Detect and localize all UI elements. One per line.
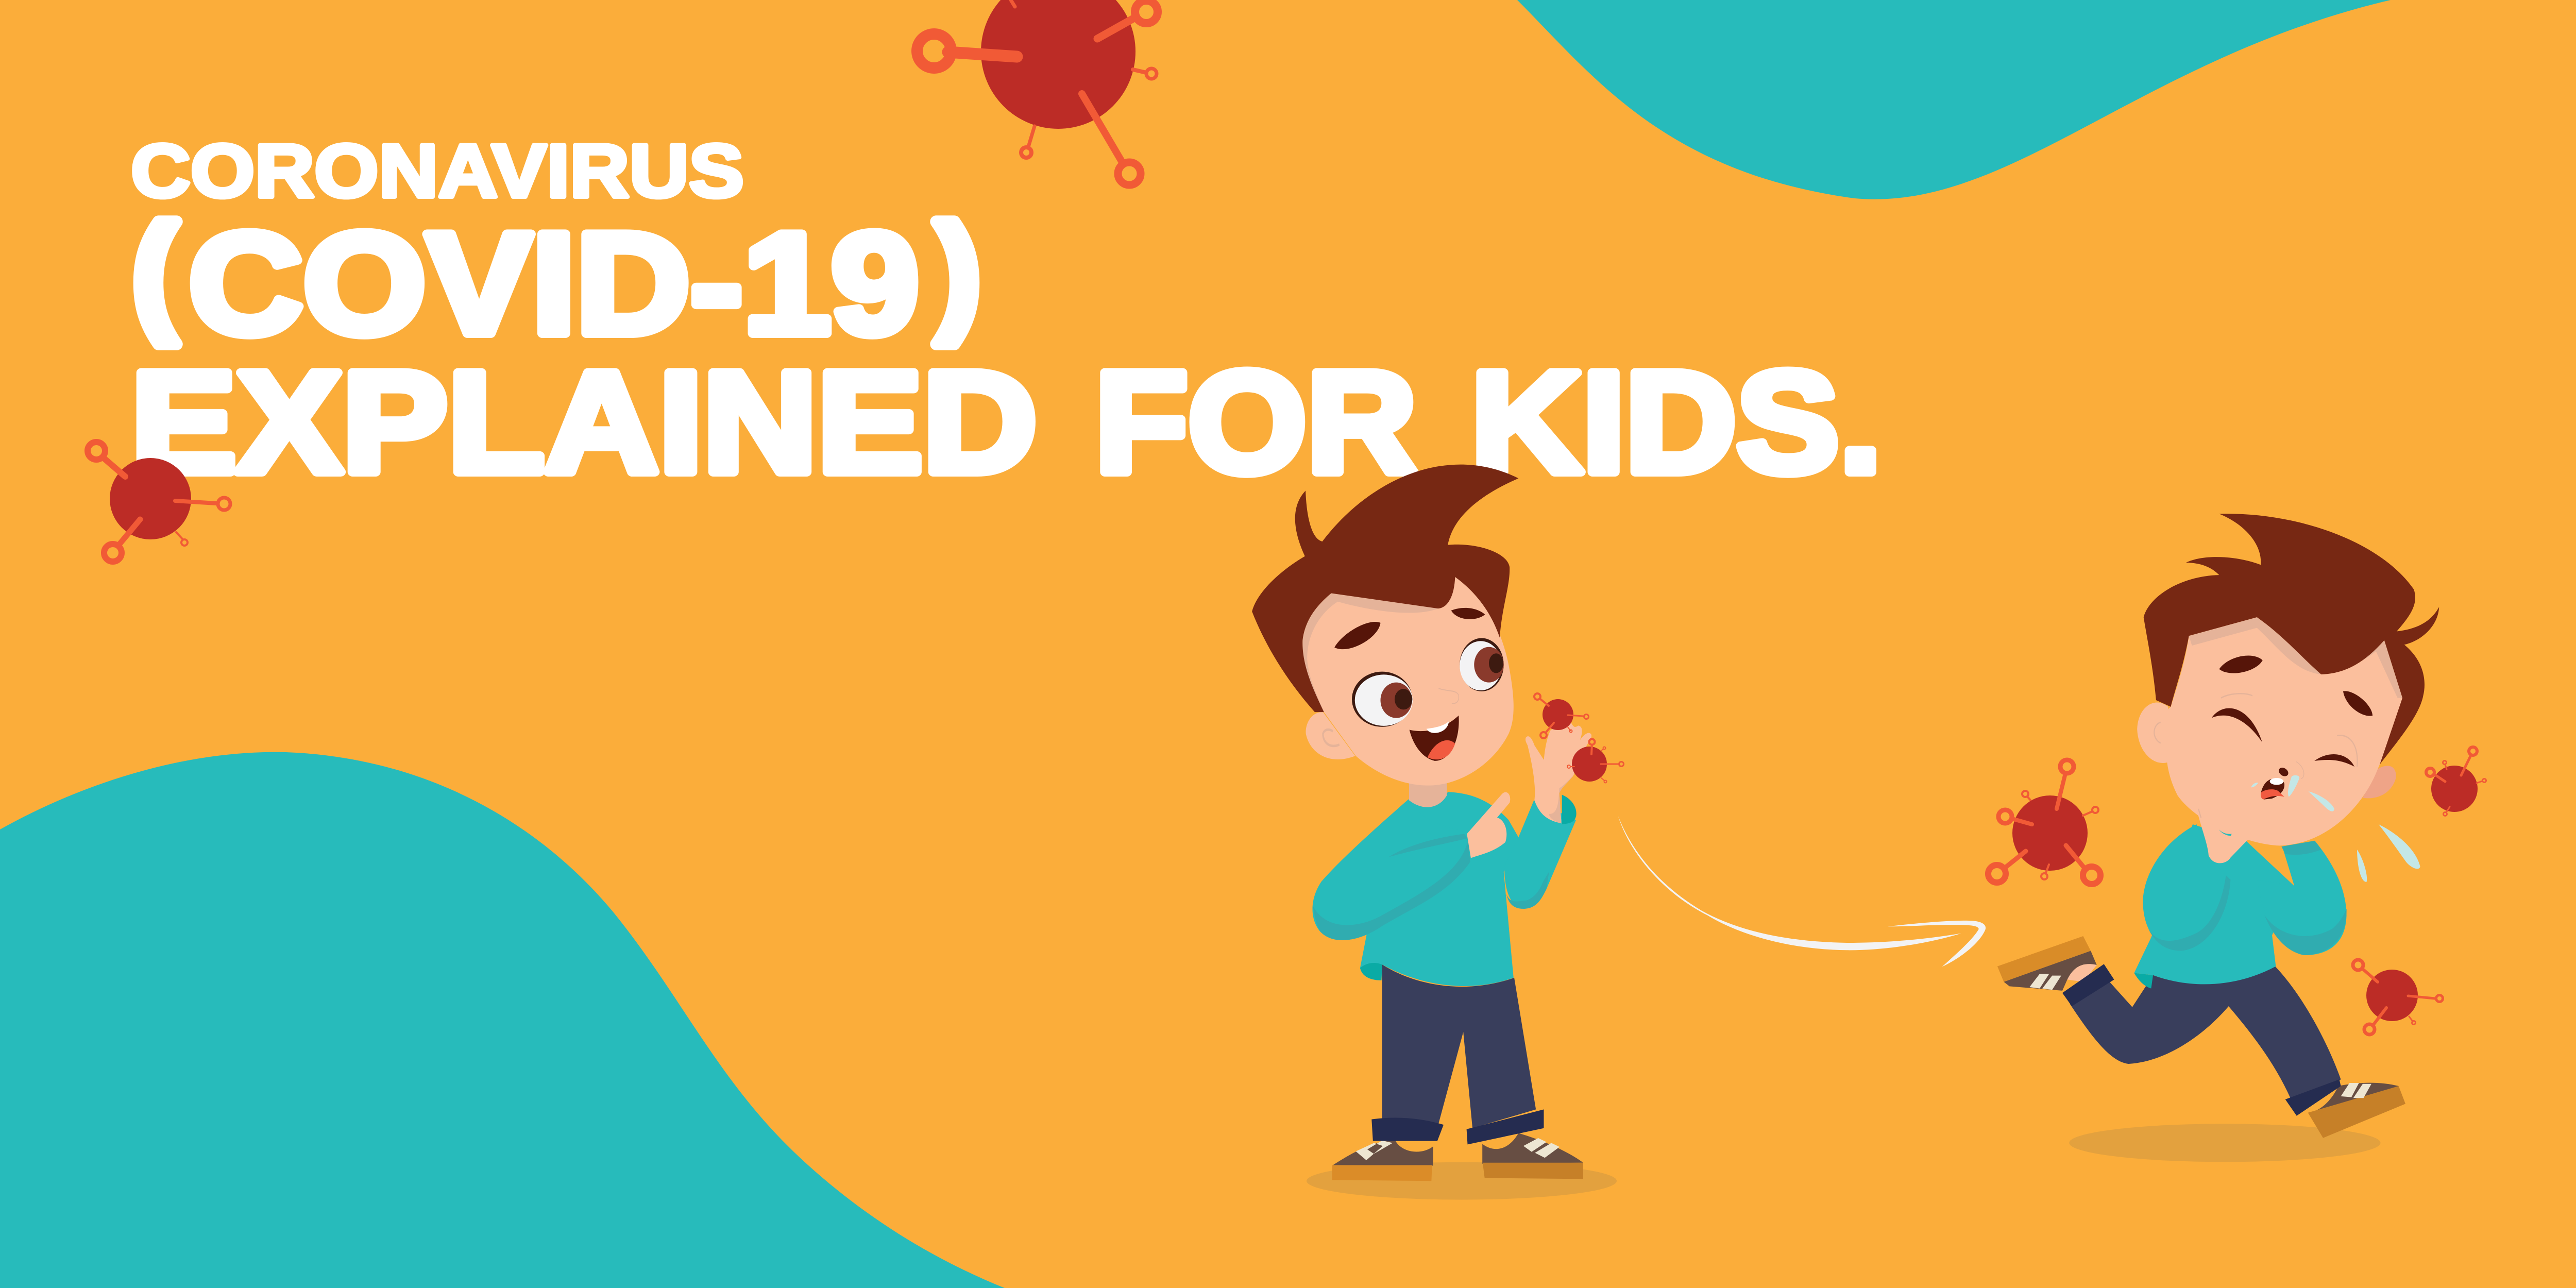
shoes [1332,1133,1583,1181]
neck [1409,783,1447,807]
forehead shadow [2189,617,2402,698]
eyebrows [2219,656,2372,716]
shoe: front [2308,1083,2405,1138]
face [1302,577,1514,786]
virus: left [88,442,230,562]
pointing hand [1467,792,1510,858]
boy sneezing [1997,514,2439,1162]
title line: coronavirus: CORONAVIRUS [131,129,744,213]
virus: on hand, upper [1534,693,1589,738]
sweater [1313,792,1576,986]
eye: right [1460,638,1504,691]
trousers [2070,967,2341,1108]
title [131,129,1882,503]
ear detail [1323,730,1340,746]
trouser cuffs [2062,964,2341,1116]
eye: left [1352,672,1413,727]
virus: on hand, lower [1567,739,1624,783]
title line: explained for kids: FOR [1095,342,1417,503]
title line: explained for kids: KIDS. [1471,342,1882,503]
trousers [1382,964,1536,1128]
ground shadow [2069,1124,2381,1162]
virus: top centre [917,0,1158,185]
shoe: raised [1997,936,2097,991]
eyes closed [2212,708,2354,767]
wrinkle lines [2154,693,2358,818]
raised hand [1526,723,1591,824]
title line: covid-19: ) [936,198,980,345]
ground shadow [1307,1162,1617,1200]
nostril [2277,766,2290,778]
teal wave: top right [1517,0,2391,199]
sneezing face details [2219,761,2334,836]
nose line [2296,761,2304,779]
neck and hand [2196,809,2257,863]
title line: explained for kids [131,342,1882,503]
ear: right [2363,766,2396,798]
trouser cuffs [1371,1109,1544,1144]
nose [1438,688,1459,703]
mouth [1410,716,1459,761]
sweater [2134,824,2347,989]
title line: explained for kids: EXPLAINED [131,342,1037,503]
boy pointing [1252,465,2486,1200]
virus: left of sneezing boy [1988,760,2100,884]
face [2163,617,2402,845]
ear: left [2137,702,2168,763]
hair [2144,514,2439,765]
eyebrows [1334,608,1485,649]
virus: lower right [2353,960,2443,1035]
mucus and tears [2251,775,2334,811]
virus: right of sneezing boy [2426,747,2486,816]
title line: covid-19: COVID-19 [189,204,919,364]
hair [1252,465,1518,712]
teal wave: bottom left [0,752,1005,1288]
collar [2219,829,2232,836]
title line: covid-19: ( [133,198,177,345]
sneezing mouth [2261,778,2284,800]
arrow [1618,816,1986,967]
ear [1306,712,1355,759]
flying droplets [2357,824,2420,882]
forehead shadow [1302,593,1438,712]
